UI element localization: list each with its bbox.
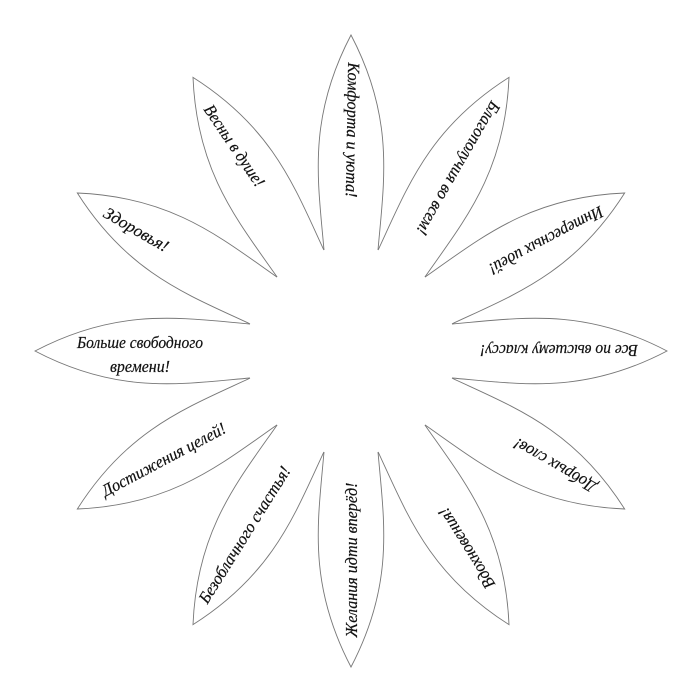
petal: Все по высшему классу: Все по высшему классу! xyxy=(480,341,638,360)
petal: Благополучия во всем: Благополучия во всем! xyxy=(412,97,505,238)
petal: Комфорта и уюта: Комфорта и уюта! xyxy=(342,61,363,198)
petal: Добрых слов xyxy=(422,373,641,537)
petal: Добрых слов: Добрых слов! xyxy=(510,434,601,498)
petal: Интересных идей: Интересных идей! xyxy=(486,202,608,279)
petal: Безоблачного счастья: Безоблачного счастья! xyxy=(194,463,294,608)
petal: Вдохновения xyxy=(373,422,537,641)
petal: Комфорта и уюта xyxy=(318,35,384,250)
petal: Весны в душе: Весны в душе! xyxy=(200,101,269,190)
petal: Интересных идей xyxy=(422,165,641,329)
petal: Достижения целей: Достижения целей! xyxy=(97,419,229,501)
petal: Больше свободного времени xyxy=(35,318,250,384)
petal: Больше свободного времени: времени! xyxy=(110,357,170,376)
petal: Благополучия во всем xyxy=(373,61,537,280)
petal: Здоровья xyxy=(61,165,280,329)
petal: Достижения целей xyxy=(61,373,280,537)
petal: Безоблачного счастья xyxy=(165,422,329,641)
petal: Вдохновения: Вдохновения! xyxy=(434,504,499,592)
petal: Здоровья: Здоровья! xyxy=(100,203,172,256)
petal: Весны в душе xyxy=(165,61,329,280)
petal: Все по высшему классу xyxy=(452,318,667,384)
petal: Желания идти вперёд xyxy=(318,452,384,667)
petal: Больше свободного времени: Больше свободного xyxy=(76,333,203,352)
petal: Желания идти вперёд: Желания идти вперёд! xyxy=(342,482,361,638)
